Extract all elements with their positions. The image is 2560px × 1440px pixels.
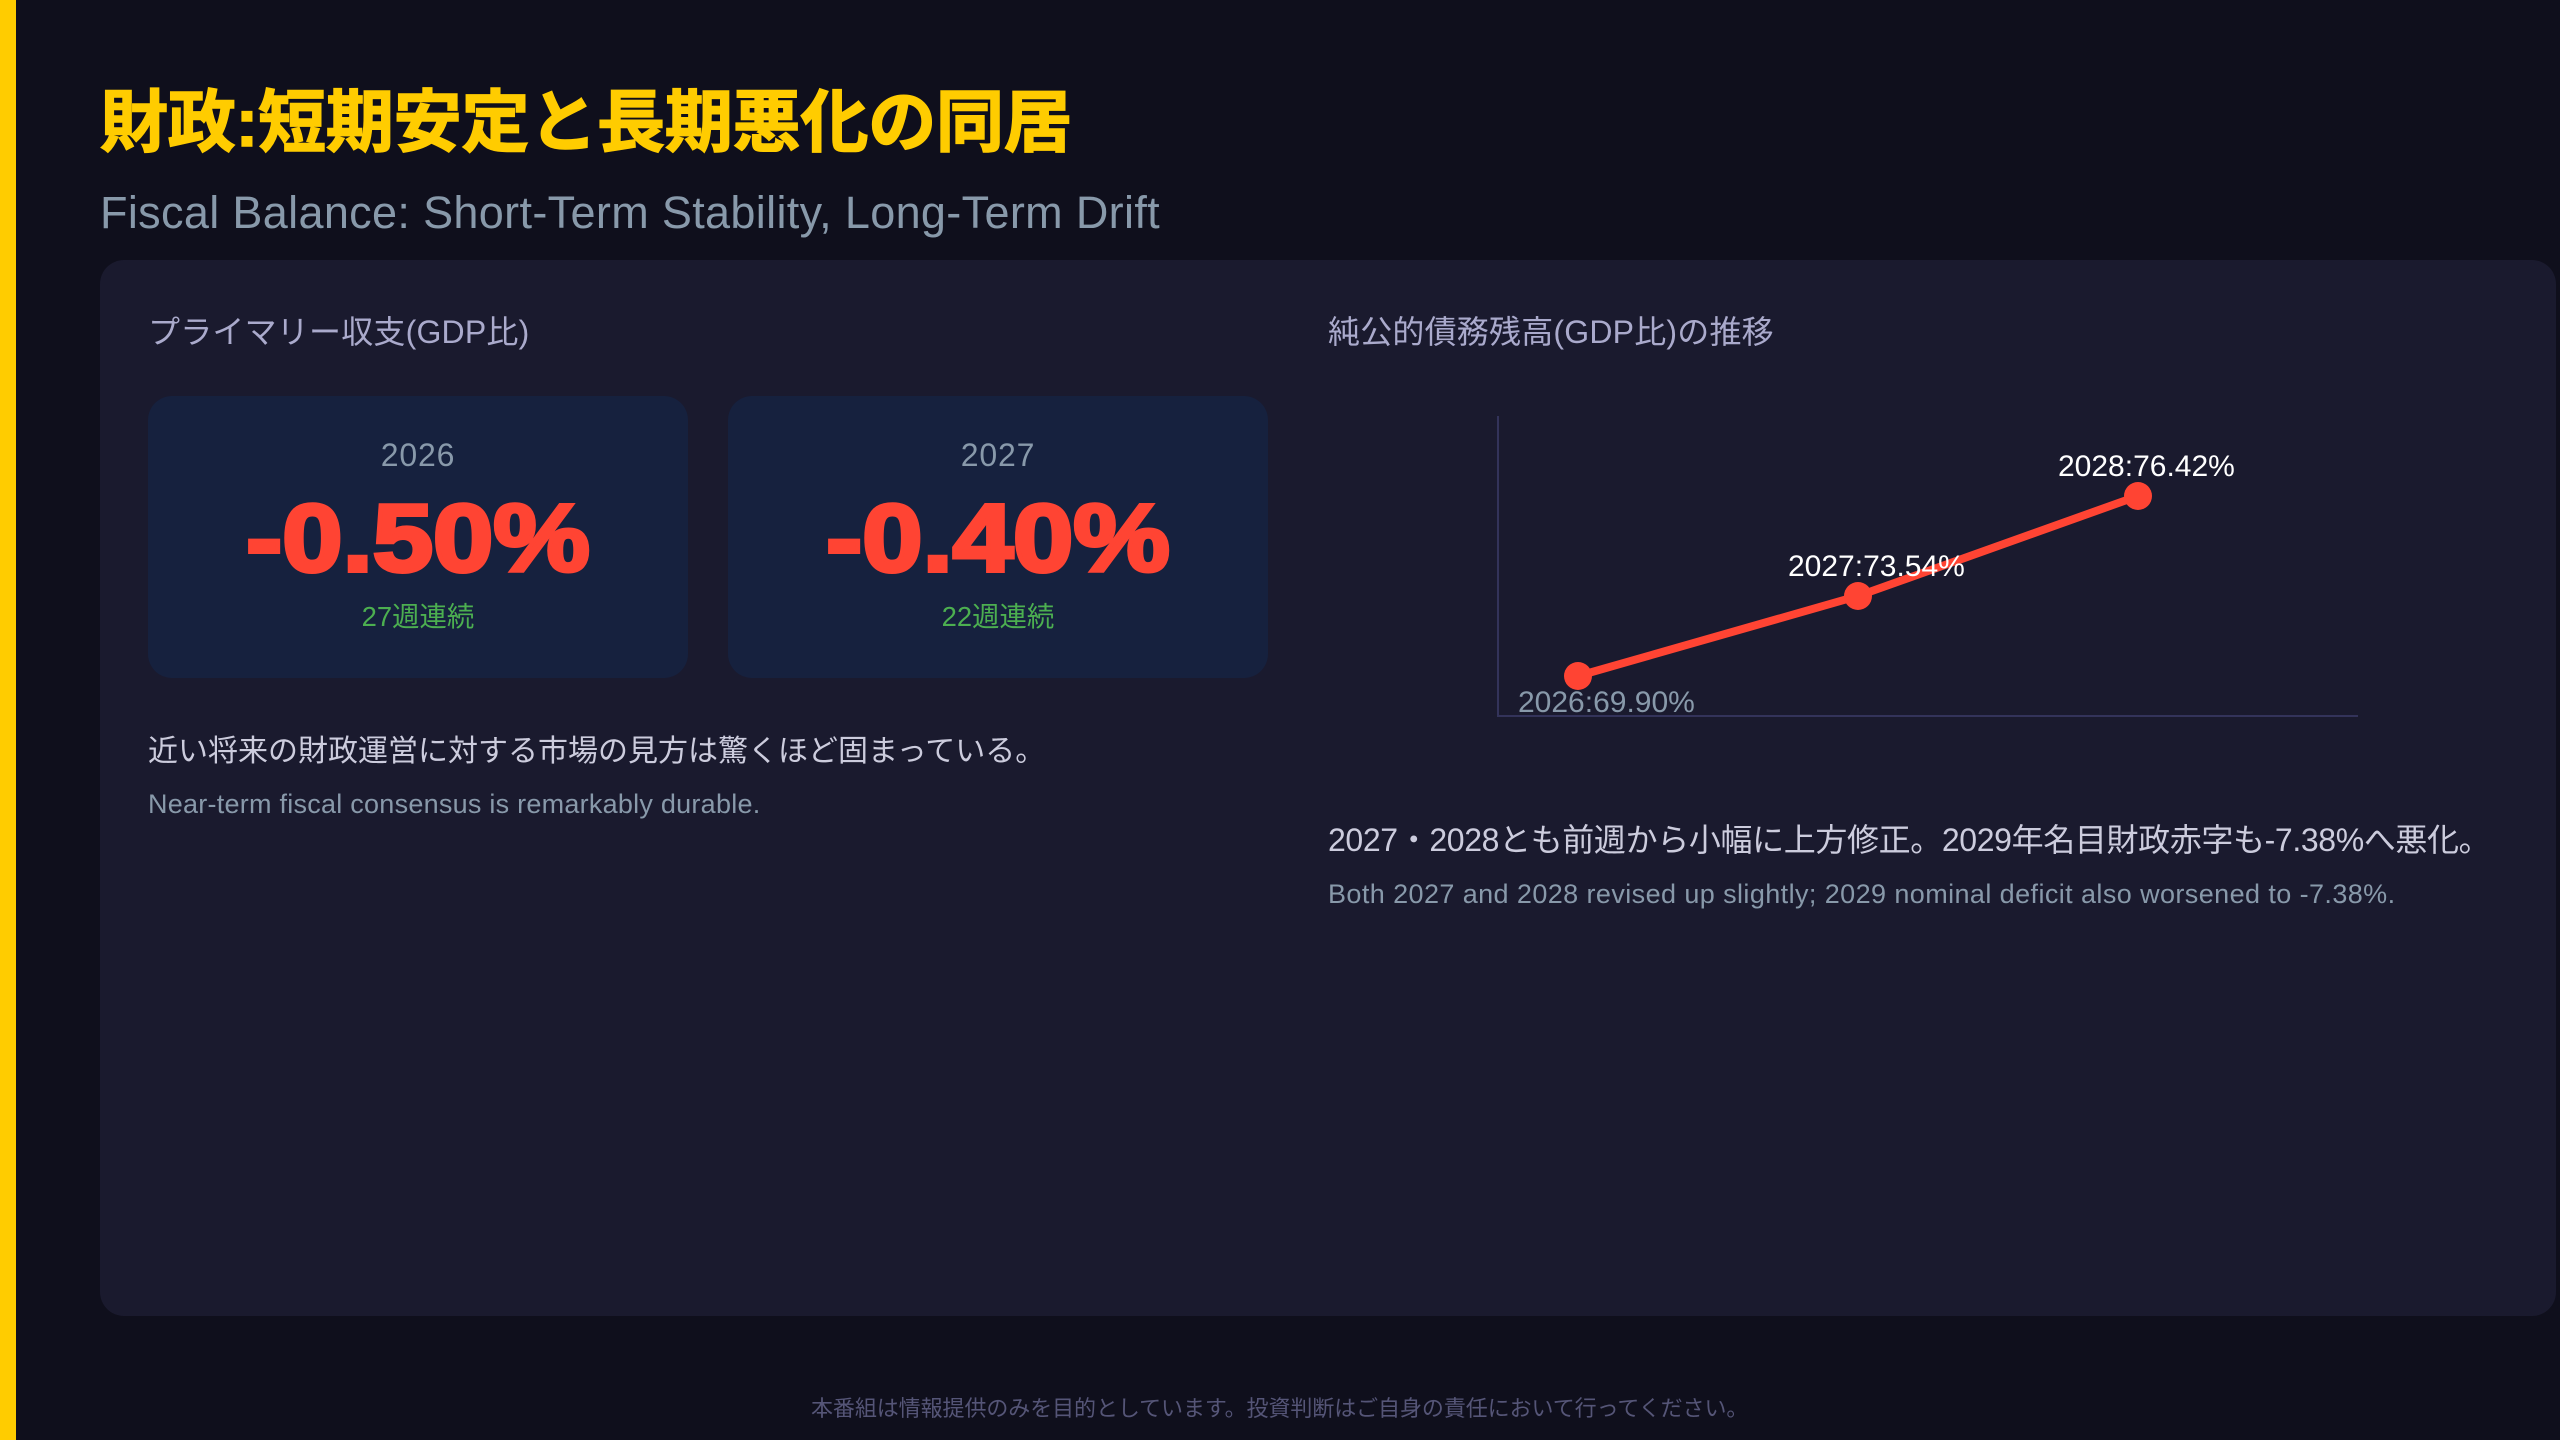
accent bar xyxy=(0,0,16,1440)
card value 2027: -0.40% xyxy=(826,485,1170,592)
label 2026: 2026:69.90% xyxy=(1518,686,1695,719)
body text: near-term English: Near-term fiscal consensus is remarkably durable. xyxy=(148,789,760,819)
subtitle: Fiscal Balance: Short-Term Stability, Long-Term Drift xyxy=(100,187,1160,238)
footer disclaimer: 本番組は情報提供のみを目的としています。投資判断はご自身の責任において行ってください。 xyxy=(811,1396,1748,1421)
card streak 2026: 27週連続 xyxy=(362,601,474,632)
card year 2027: 2027 xyxy=(961,437,1035,473)
data points xyxy=(1564,482,2152,690)
body text: debt Japanese: 2027・2028とも前週から小幅に上方修正。2029年名目財政赤字も-7.38%へ悪化。 xyxy=(1328,822,2490,858)
card value 2026: -0.50% xyxy=(246,485,590,592)
heading: primary balance: プライマリー収支(GDP比) xyxy=(148,314,529,350)
body text: near-term Japanese: 近い将来の財政運営に対する市場の見方は驚くほど固まっている。 xyxy=(148,735,1045,768)
card year 2026: 2026 xyxy=(381,437,455,473)
chart axes xyxy=(1498,416,2358,716)
title: 財政:短期安定と長期悪化の同居 xyxy=(100,85,1072,161)
body text: debt English: Both 2027 and 2028 revised up slightly; 2029 nominal deficit also worsened to -7.38%. xyxy=(1328,879,2396,909)
panel: main content xyxy=(100,260,2556,1316)
data line xyxy=(1578,496,2138,676)
label 2028: 2028:76.42% xyxy=(2058,450,2235,483)
card: 2026 primary balance xyxy=(148,396,688,678)
card streak 2027: 22週連続 xyxy=(942,601,1054,632)
heading: net public debt: 純公的債務残高(GDP比)の推移 xyxy=(1328,314,1774,350)
card: 2027 primary balance xyxy=(728,396,1268,678)
label 2027: 2027:73.54% xyxy=(1788,550,1965,583)
